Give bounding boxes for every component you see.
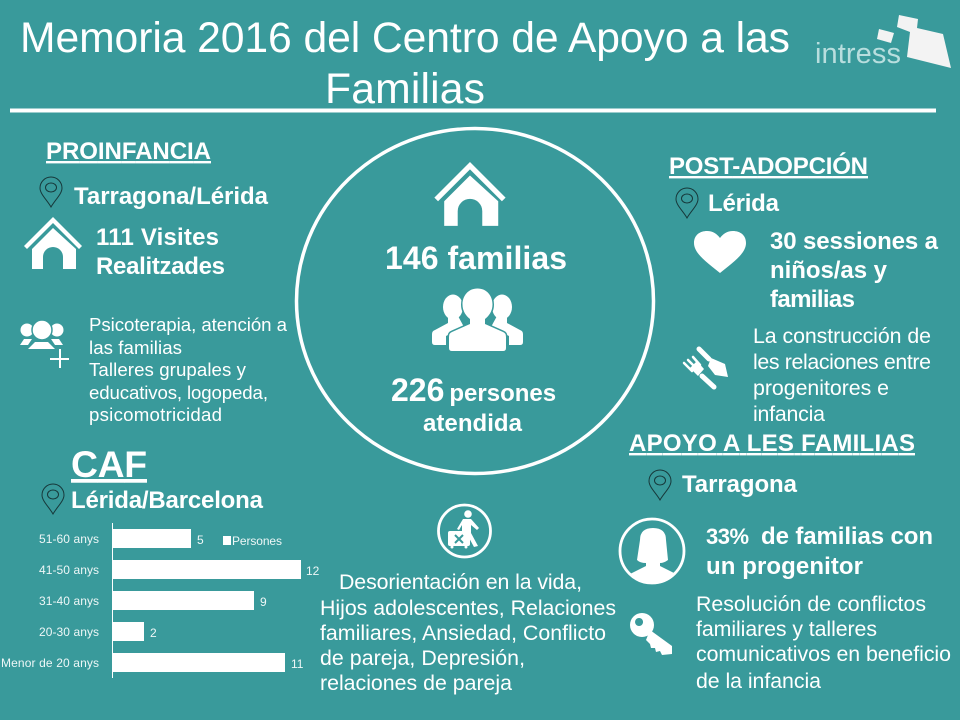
title	[20, 14, 790, 113]
bar chart: 51-60 anys	[39, 532, 99, 546]
stat: 30 sessiones	[770, 228, 939, 313]
text: resolución	[696, 592, 951, 693]
icon: key	[630, 613, 672, 655]
title: Memoria 2016 del Centro de Apoyo a las	[20, 14, 790, 62]
title: Familias	[325, 65, 485, 113]
icon: woman in circle	[620, 519, 684, 584]
text: relaciones	[753, 324, 931, 426]
panel: issues	[320, 505, 616, 695]
panel: apoyo a les familias	[620, 430, 951, 693]
stat: 30 sessiones: niños/as y	[770, 257, 888, 284]
text: services	[89, 314, 288, 425]
panel: proinfancia	[20, 138, 288, 425]
stat label: atendida: atendida	[423, 410, 523, 437]
stat: 33%: un progenitor	[706, 553, 863, 580]
location: Tarragona/Lérida: Tarragona/Lérida	[74, 183, 269, 210]
text: services: educativos, logopeda,	[89, 382, 268, 403]
stat: 226 persones: 226persones	[391, 372, 556, 408]
logo: intress: intress	[815, 38, 901, 70]
stat: 33%: 33%	[706, 524, 749, 549]
heading: CAF: CAF	[71, 443, 147, 485]
panel: central circle	[296, 128, 654, 474]
bar chart: 31-40 anys	[39, 594, 99, 608]
stat: 33%	[706, 523, 933, 580]
text: services: Psicoterapia, atención a	[89, 314, 288, 335]
icon: location pin	[676, 188, 698, 218]
panel: CAF	[1, 443, 320, 678]
location: Lérida/Barcelona: Lérida/Barcelona	[71, 487, 264, 514]
icon: location pin	[42, 484, 64, 514]
stat: 30 sessiones: familias	[770, 286, 855, 313]
text: resolución: comunicativos en beneficio	[696, 642, 951, 666]
text: issues: familiares, Ansiedad, Conflicto	[320, 621, 606, 645]
heading: apoyo a les familias: APOYO A LES FAMILIAS	[629, 430, 915, 457]
icon: location pin	[649, 470, 671, 500]
panel: post-adopción	[669, 152, 939, 426]
text: relaciones: les relaciones entre	[753, 350, 931, 374]
text: relaciones: progenitores e	[753, 376, 889, 400]
logo: intress	[815, 15, 951, 70]
stat: 111 visites: 111 Visites	[96, 224, 219, 251]
icon: heart	[694, 231, 746, 273]
text: issues	[320, 570, 616, 695]
stat: 30 sessiones: 30 sessiones a	[770, 228, 939, 255]
heading: post-adopción: POST-ADOPCIÓN	[669, 152, 868, 180]
icon: house	[24, 217, 82, 269]
text: resolución: de la infancia	[696, 669, 821, 693]
bar chart: 5	[197, 533, 204, 547]
text: resolución: Resolución de conflictos	[696, 592, 926, 616]
text: issues: de pareja, Depresión,	[320, 646, 525, 670]
bar chart: 41-50 anys	[39, 563, 99, 577]
location: Lérida: Lérida	[708, 190, 780, 217]
icon: people	[432, 288, 523, 351]
stat label: realitzades: Realitzades	[96, 253, 225, 280]
text: issues: relaciones de pareja	[320, 671, 512, 695]
bar chart: 9	[260, 595, 267, 609]
bar chart: 11	[291, 657, 304, 671]
text: resolución: familiares y talleres	[696, 617, 877, 641]
text: relaciones: infancia	[753, 402, 825, 426]
text: issues: Desorientación en la vida,	[339, 570, 582, 594]
chart legend: Persones	[232, 534, 282, 548]
bar chart: 20-30 anys	[39, 625, 99, 639]
icon: garden tools	[684, 349, 728, 387]
heading: proinfancia: PROINFANCIA	[46, 138, 211, 165]
location: Tarragona: Tarragona	[682, 471, 798, 498]
icon: house	[434, 162, 506, 226]
icon: group plus	[20, 320, 69, 368]
text: issues: Hijos adolescentes, Relaciones	[320, 596, 616, 620]
icon: location pin	[40, 177, 62, 207]
text: relaciones: La construcción de	[753, 324, 931, 348]
bar chart	[1, 523, 320, 678]
bar chart: Menor de 20 anys	[1, 656, 99, 670]
stat: 33%: de familias con	[761, 523, 933, 550]
bar chart: 2	[150, 626, 157, 640]
text: services: Talleres grupales y	[89, 359, 247, 380]
icon: traveller with suitcase	[438, 505, 490, 557]
text: services: las familias	[89, 337, 182, 358]
bar chart: 12	[306, 564, 320, 578]
text: services: psicomotricidad	[89, 404, 222, 425]
stat: 146 familias: 146 familias	[385, 240, 567, 276]
